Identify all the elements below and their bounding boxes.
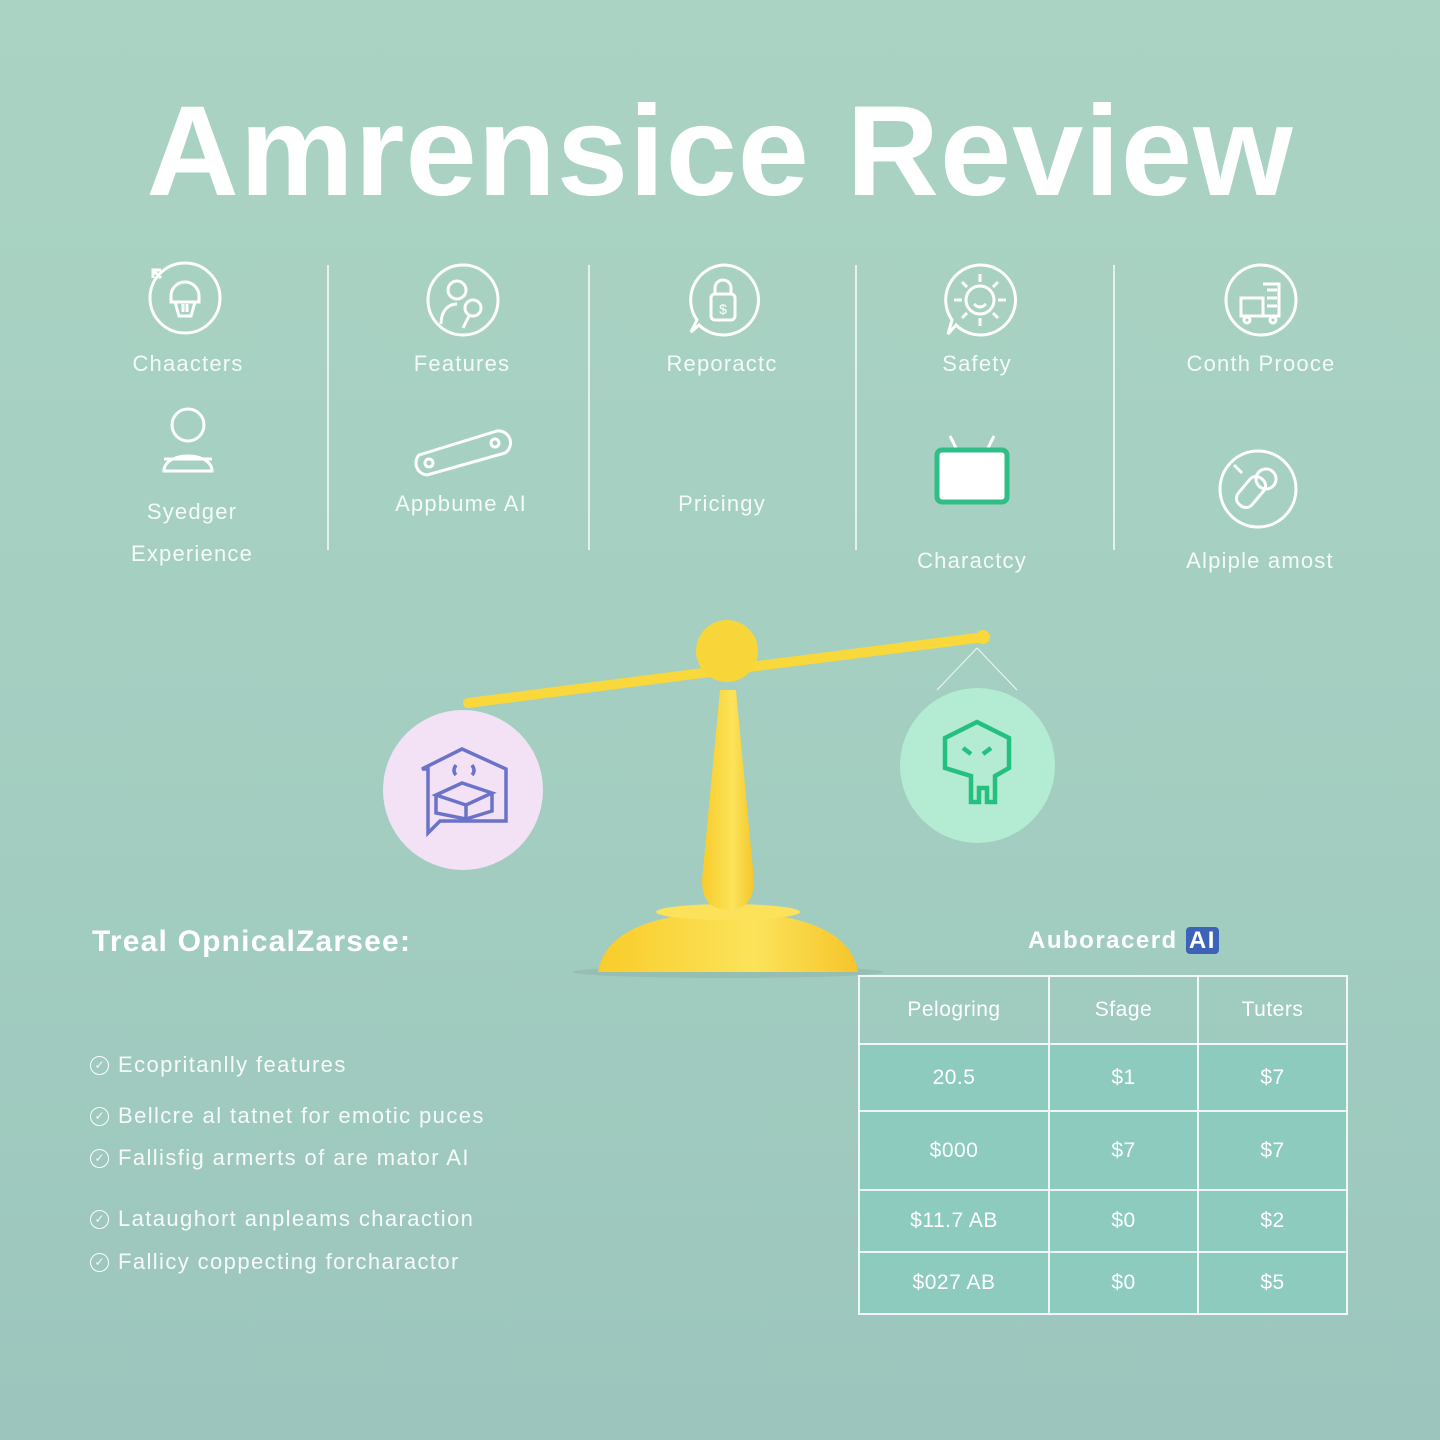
table: $027 AB <box>913 1271 995 1294</box>
icon: user <box>162 408 214 472</box>
table: Sfage <box>1095 998 1152 1021</box>
icon: safety <box>944 264 1017 336</box>
table: Pelogring <box>907 998 1001 1021</box>
checklist: ✓ <box>94 1254 105 1268</box>
label: charactcy: Charactcy <box>917 548 1027 573</box>
checklist: Bellcre al tatnet for emotic puces <box>118 1103 485 1128</box>
table <box>858 975 1348 1315</box>
table: $11.7 AB <box>910 1209 998 1232</box>
icon: left pan box <box>421 747 508 837</box>
label: safety: Safety <box>942 351 1012 376</box>
table: Tuters <box>1242 998 1303 1021</box>
heading: right: Auboracerd AI <box>1028 927 1216 954</box>
checklist: ✓ <box>94 1212 105 1226</box>
checklist: ✓ <box>94 1150 105 1164</box>
table: $7 <box>1260 1138 1285 1162</box>
heading: left: Treal OpnicalZarsee: <box>92 925 411 958</box>
label: syedger experience: Experience <box>131 541 253 566</box>
icon: characters <box>148 262 222 334</box>
label: appbume ai: Appbume AI <box>395 491 527 516</box>
circle: left pan <box>383 710 543 870</box>
icon: features <box>426 264 500 336</box>
icon: tv <box>934 436 1010 504</box>
table: 20.5 <box>933 1066 975 1088</box>
label: syedger experience: Syedger <box>147 499 237 524</box>
scale <box>463 620 1018 978</box>
label: pricing: Pricingy <box>678 491 766 516</box>
icon: reporacto <box>689 264 760 336</box>
checklist: ✓ <box>94 1108 105 1122</box>
table: $2 <box>1260 1209 1285 1232</box>
table: $1 <box>1111 1066 1136 1088</box>
label: reporacto: Reporactc <box>666 351 778 376</box>
circle: right pan <box>900 688 1055 843</box>
checklist <box>90 1052 485 1274</box>
icon: appbume <box>414 429 512 476</box>
checklist: Ecopritanlly features <box>118 1052 347 1077</box>
title: Amrensice Review <box>146 80 1294 223</box>
icon: conth prooce <box>1224 264 1298 336</box>
icon: mic <box>1218 450 1298 528</box>
icon: reporacto: $ <box>719 301 727 317</box>
icon: right pan robot <box>942 720 1012 804</box>
checklist: Fallisfig armerts of are mator AI <box>118 1145 470 1170</box>
label: syedger experience <box>131 499 253 566</box>
label: characters: Chaacters <box>132 351 244 376</box>
table: $000 <box>930 1138 978 1162</box>
checklist: Fallicy coppecting forcharactor <box>118 1249 460 1274</box>
checklist: ✓ <box>94 1058 105 1072</box>
table: $7 <box>1111 1138 1136 1162</box>
label: alpiple amost: Alpiple amost <box>1186 548 1334 573</box>
label: features: Features <box>414 351 510 376</box>
checklist: Lataughort anpleams charaction <box>118 1206 474 1231</box>
label: conth prooce: Conth Prooce <box>1187 351 1335 376</box>
dividers <box>327 265 329 550</box>
table: $0 <box>1111 1209 1136 1232</box>
table: $5 <box>1260 1271 1285 1294</box>
table: $7 <box>1260 1066 1285 1088</box>
table: $0 <box>1111 1271 1136 1294</box>
